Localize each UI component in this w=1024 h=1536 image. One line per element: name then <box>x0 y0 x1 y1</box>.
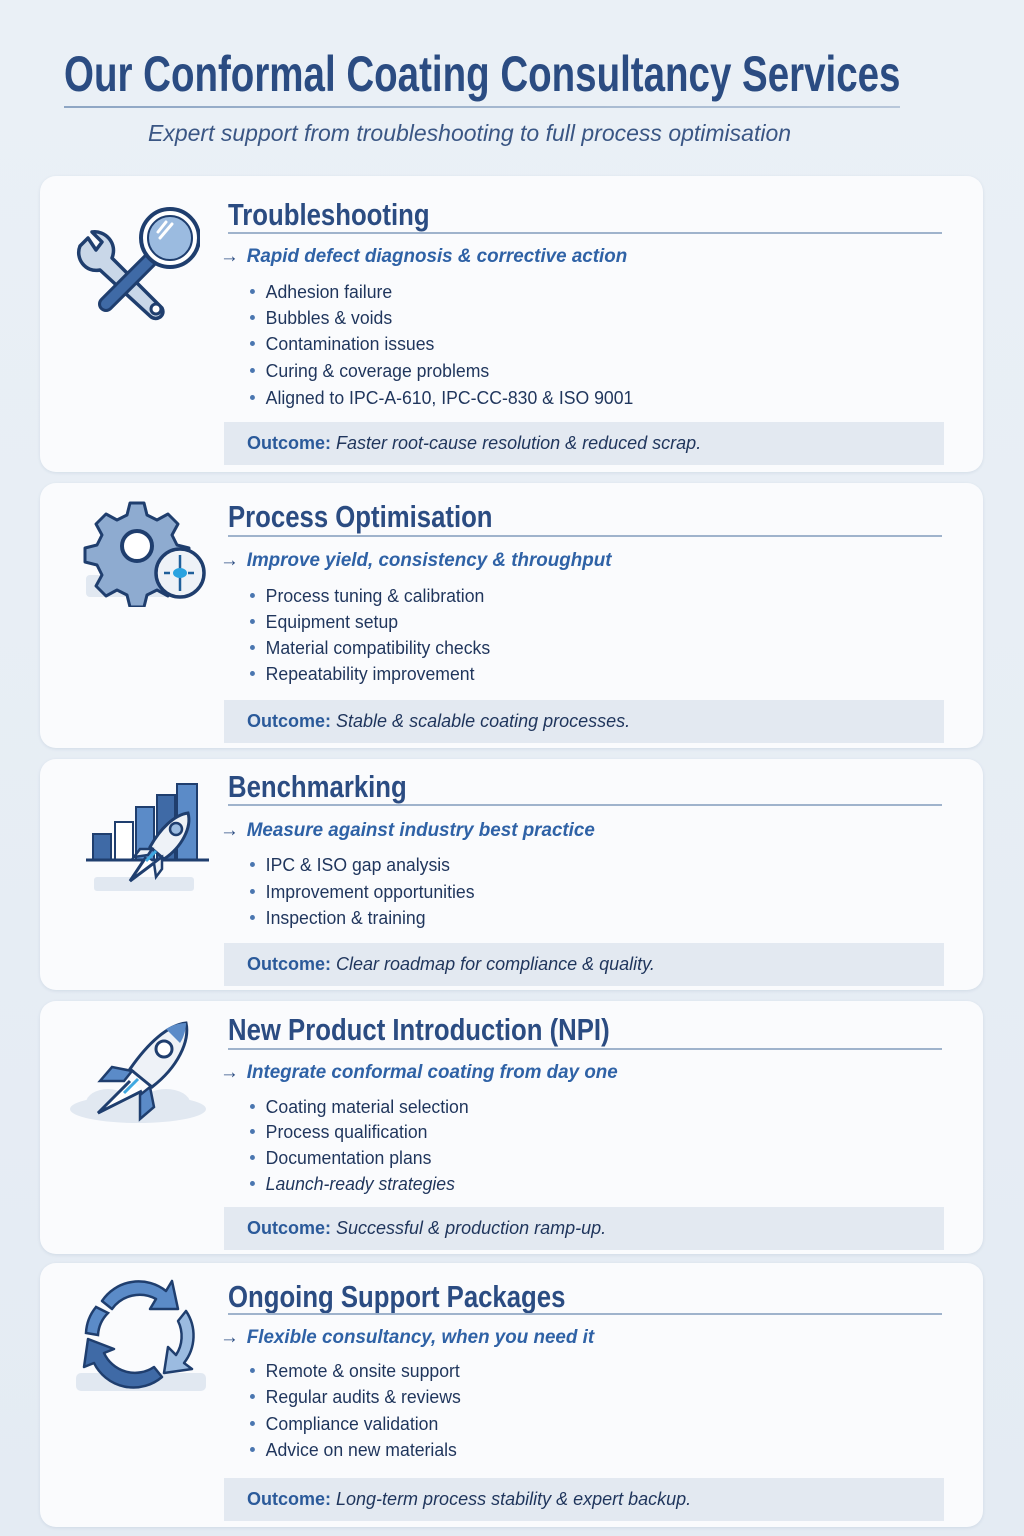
icon: cycle arrows <box>76 1280 206 1391</box>
bullet list <box>250 855 475 928</box>
bullet list: Contamination issues <box>266 334 434 354</box>
tagline: → Measure against industry best practice <box>220 820 595 841</box>
outcome <box>224 1207 944 1250</box>
bullet list: Repeatability improvement <box>266 664 475 684</box>
outcome: Outcome: Faster root-cause resolution & reduced scrap. <box>247 433 701 453</box>
bullet list: Inspection & training <box>266 908 426 928</box>
outcome: Outcome: Successful & production ramp-up. <box>247 1218 606 1238</box>
bullet list: Compliance validation <box>266 1414 438 1434</box>
bullet list: Process tuning & calibration <box>266 586 484 606</box>
bullet list: Documentation plans <box>266 1148 431 1168</box>
heading: Ongoing Support Packages <box>228 1279 565 1314</box>
icon: gear with gauge <box>84 502 206 607</box>
bullet list: Adhesion failure <box>266 282 392 302</box>
heading: Process Optimisation <box>228 499 493 534</box>
bullet list: Regular audits & reviews <box>266 1387 461 1407</box>
panel: process optimisation <box>40 483 983 748</box>
tagline: → Rapid defect diagnosis & corrective action <box>220 246 627 267</box>
bullet list: Advice on new materials <box>266 1440 457 1460</box>
icon: bar chart with rocket <box>86 783 209 891</box>
heading: Benchmarking <box>228 769 407 804</box>
bullet list: IPC & ISO gap analysis <box>266 855 450 875</box>
outcome <box>224 422 944 465</box>
bullet list: Equipment setup <box>266 612 398 632</box>
icon: wrench and magnifier <box>76 207 200 320</box>
heading: Troubleshooting <box>228 197 430 232</box>
bullet list: Curing & coverage problems <box>266 361 489 381</box>
outcome <box>224 943 944 986</box>
outcome <box>224 1478 944 1521</box>
panel: ongoing support <box>40 1263 983 1527</box>
bullet list: Material compatibility checks <box>266 638 490 658</box>
tagline: → Improve yield, consistency & throughput <box>220 550 611 571</box>
panel: troubleshooting <box>40 176 983 472</box>
outcome: Outcome: Long-term process stability & expert backup. <box>247 1489 691 1509</box>
bullet list: Process qualification <box>266 1122 427 1142</box>
title: Our Conformal Coating Consultancy Services <box>64 46 900 102</box>
outcome: Outcome: Stable & scalable coating processes. <box>247 711 630 731</box>
bullet list: Bubbles & voids <box>266 308 392 328</box>
outcome <box>224 700 944 743</box>
bullet list <box>250 586 490 684</box>
bullet list <box>250 282 633 408</box>
tagline: → Integrate conformal coating from day one <box>220 1062 618 1083</box>
panel: NPI <box>40 1001 983 1254</box>
outcome: Outcome: Clear roadmap for compliance & quality. <box>247 954 655 974</box>
bullet list: Launch-ready strategies <box>266 1174 455 1194</box>
bullet list: Coating material selection <box>266 1097 469 1117</box>
icon: rocket <box>70 1021 206 1123</box>
bullet list <box>250 1097 469 1194</box>
bullet list: Improvement opportunities <box>266 882 475 902</box>
subtitle: Expert support from troubleshooting to full process optimisation <box>148 120 791 146</box>
bullet list <box>250 1361 461 1460</box>
tagline: → Flexible consultancy, when you need it <box>220 1327 594 1348</box>
heading: New Product Introduction (NPI) <box>228 1012 610 1047</box>
bullet list: Remote & onsite support <box>266 1361 460 1381</box>
bullet list: Aligned to IPC-A-610, IPC-CC-830 & ISO 9001 <box>266 388 633 408</box>
panel: benchmarking <box>40 759 983 990</box>
